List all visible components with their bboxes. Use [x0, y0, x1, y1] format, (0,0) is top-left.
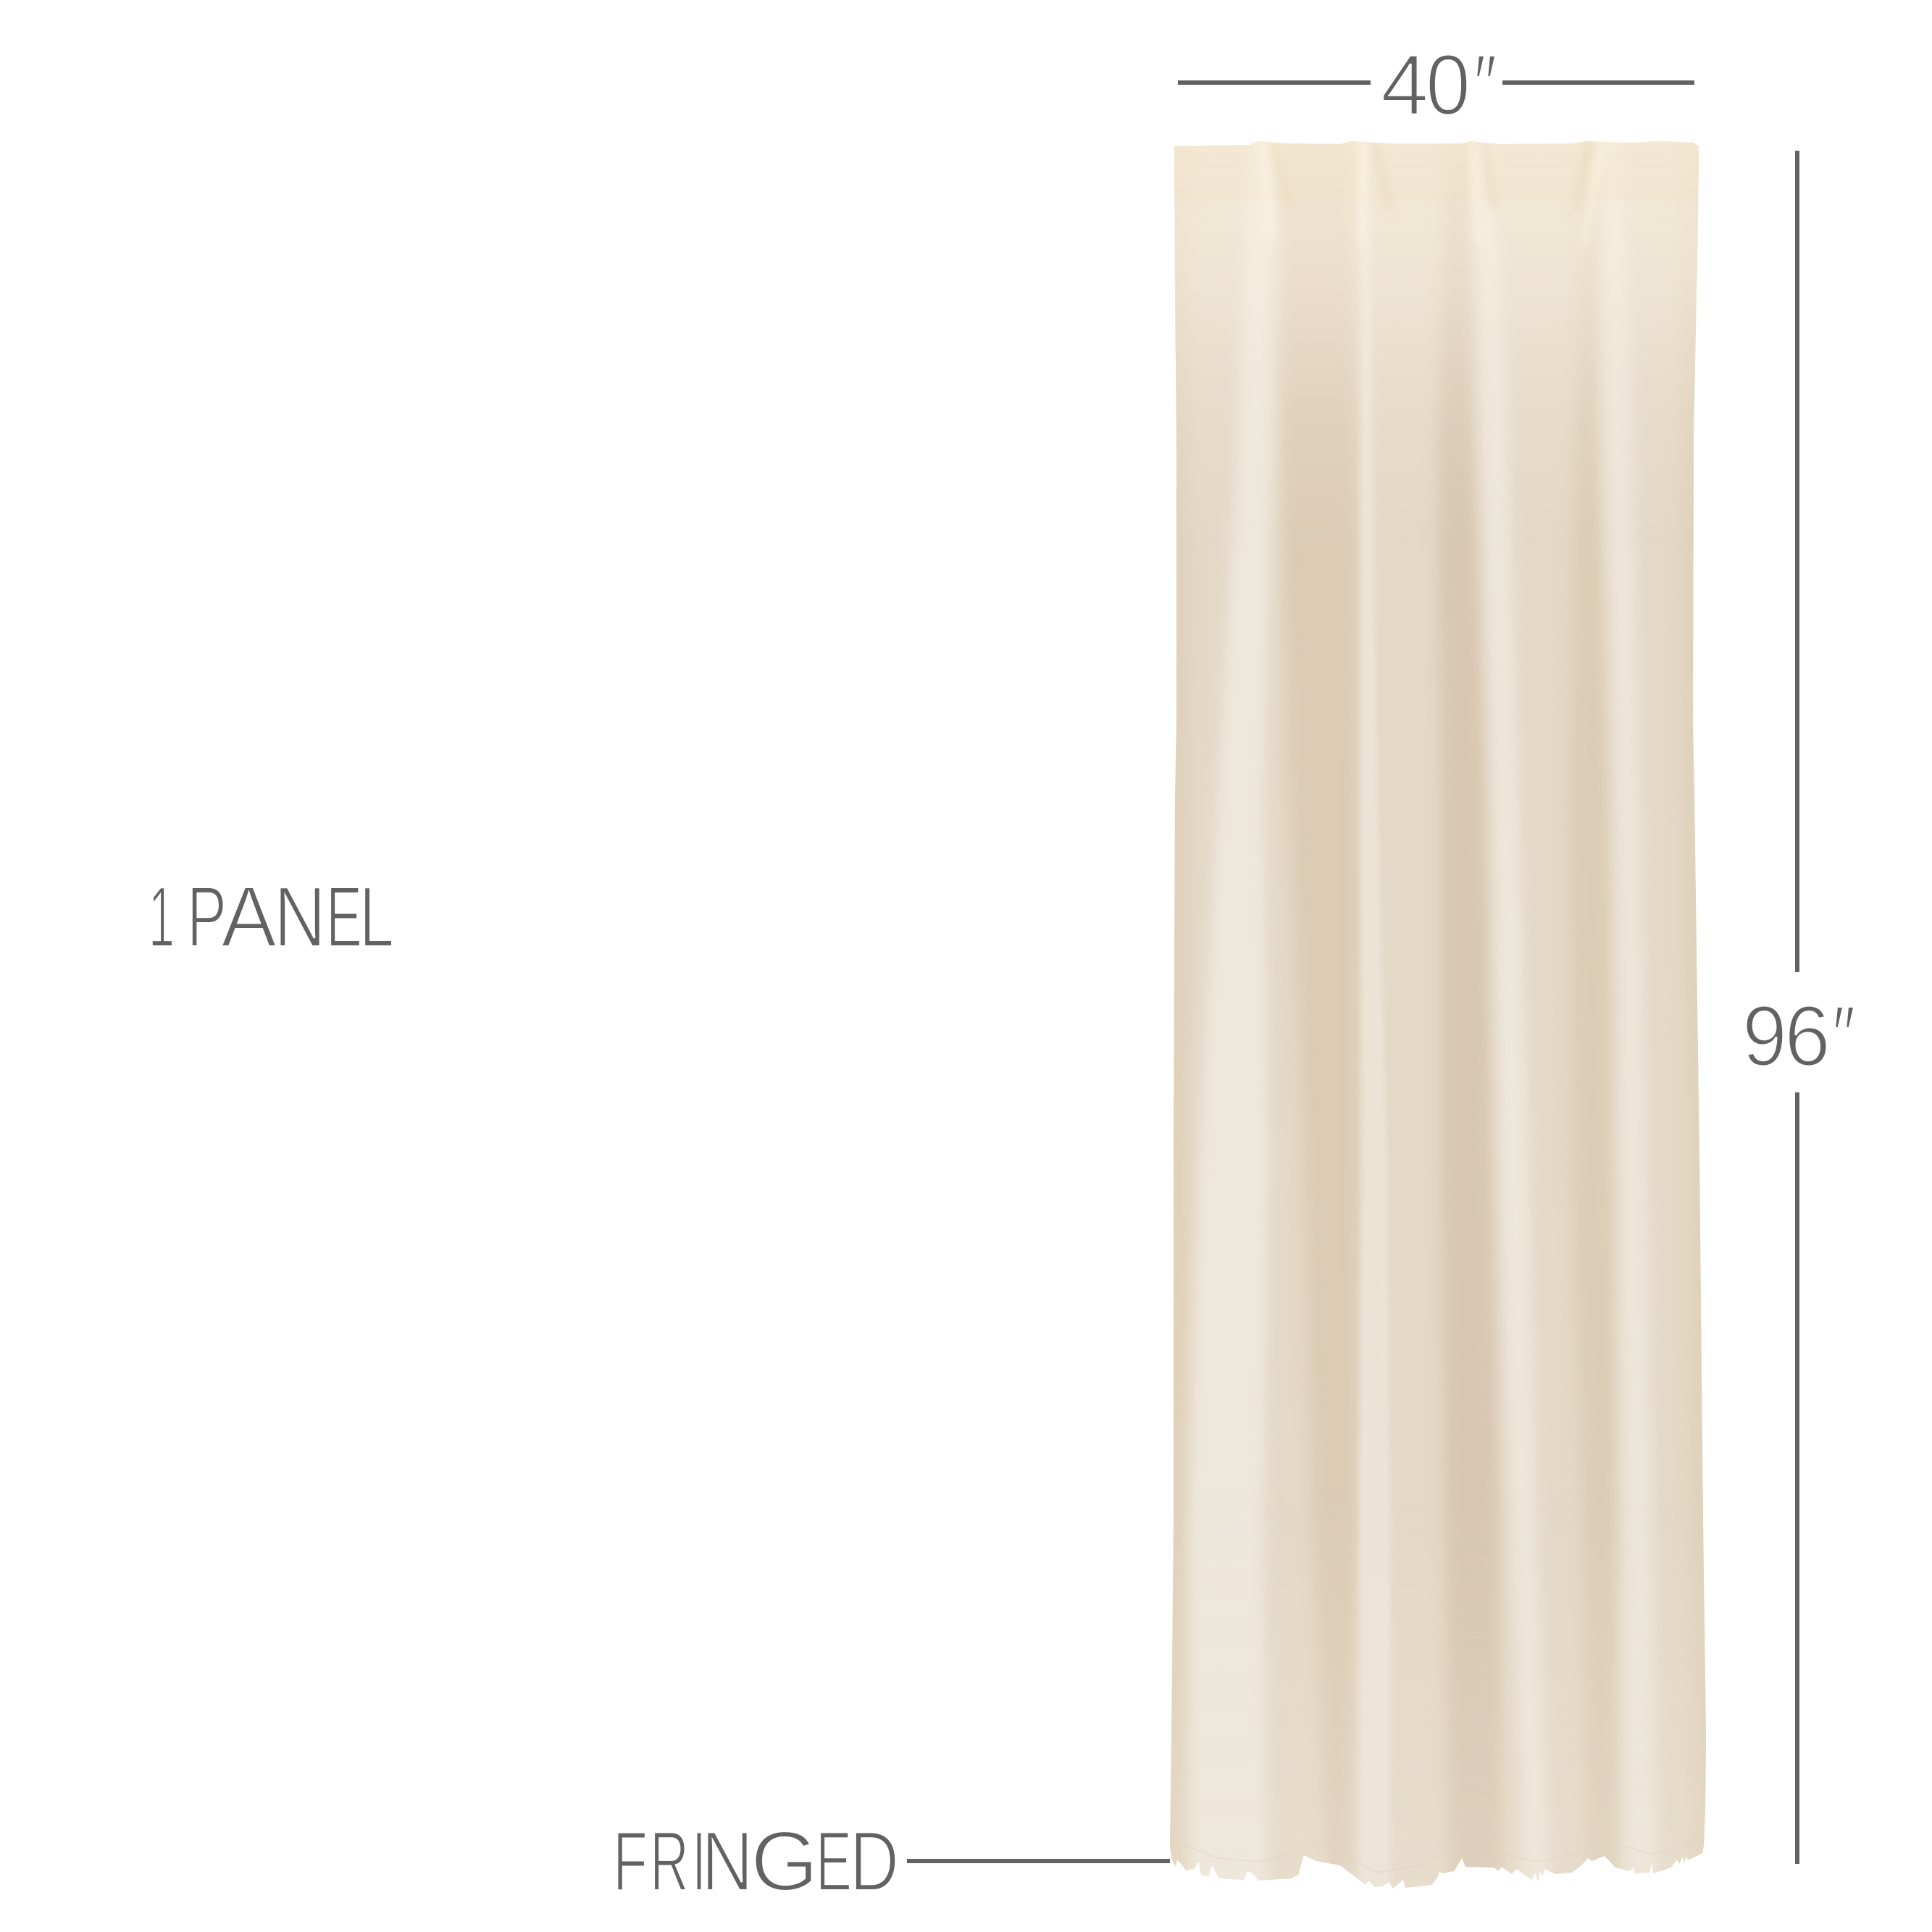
label: 1 panel: P: [187, 869, 227, 965]
height dimension: 96 inches: 6: [1784, 988, 1831, 1084]
width dimension: 40 inches: ″: [1471, 37, 1496, 133]
callout: fringed hem: R: [650, 1814, 689, 1908]
top and bottom light: [1174, 141, 1699, 426]
width dimension: 40 inches: 0: [1426, 37, 1471, 133]
callout: fringed hem: D: [850, 1814, 899, 1908]
fabric folds: [1163, 138, 1724, 1912]
callout: fringed hem: F: [613, 1814, 648, 1908]
narrow highlights: [1359, 138, 1391, 1912]
callout: fringed hem: [613, 1814, 1170, 1908]
callout: fringed hem: G: [750, 1814, 819, 1908]
width dimension: 40 inches: 4: [1381, 37, 1429, 133]
gathered pleats: [1275, 145, 1601, 241]
height dimension: 96 inches: 9: [1742, 988, 1787, 1084]
callout: fringed hem: N: [701, 1814, 753, 1908]
height dimension: 96 inches: [1742, 151, 1854, 1864]
width dimension: 40 inches: [1178, 37, 1694, 133]
label: 1 panel: A: [221, 869, 277, 965]
callout: fringed hem: E: [816, 1814, 852, 1908]
hem seam: [1187, 1845, 1663, 1873]
rod pocket band: [1242, 148, 1629, 194]
label: 1 panel: N: [274, 869, 326, 965]
curtain panel illustration: [1159, 130, 1724, 1912]
height dimension: 96 inches: ″: [1829, 988, 1854, 1084]
label: 1 panel: L: [359, 869, 394, 965]
callout: fringed hem: I: [692, 1814, 706, 1908]
label: 1 panel: E: [326, 869, 362, 965]
label: 1 panel: 1: [149, 869, 175, 965]
